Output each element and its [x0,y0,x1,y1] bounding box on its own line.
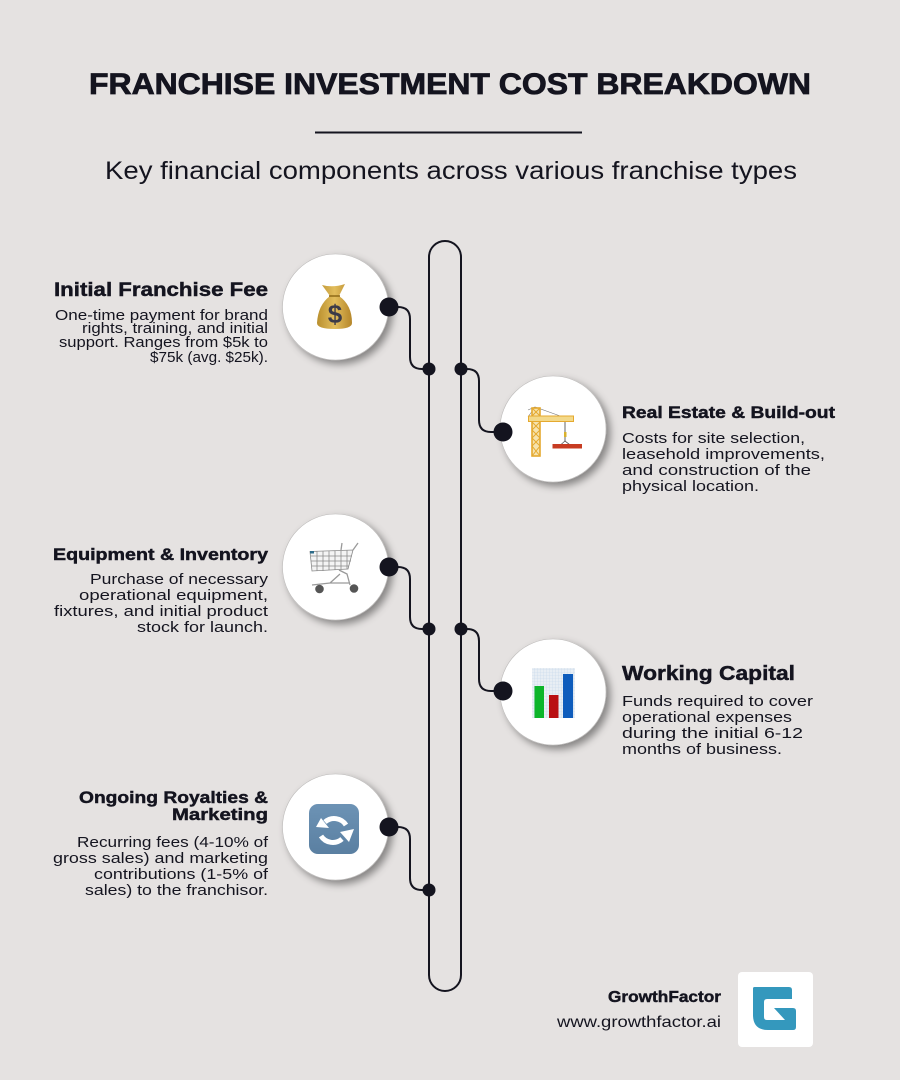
description: sales) to the franchisor. [85,882,268,899]
heading: Real Estate & Build-out [622,403,835,422]
description: during the initial 6-12 [622,725,803,742]
description: physical location. [622,478,759,495]
icon: bar chart [500,639,606,745]
footer brand [556,972,813,1047]
description [622,693,813,758]
description: support. Ranges from $5k to [59,334,268,351]
heading: Working Capital [622,663,795,685]
description: stock for launch. [137,619,268,636]
brand name: GrowthFactor [608,989,721,1006]
connector dot [380,298,398,316]
heading: Marketing [172,805,268,824]
description [55,307,268,366]
connector dot [380,558,398,576]
connector dot [494,682,512,700]
description: rights, training, and initial [82,320,268,337]
icon: money bag [282,254,388,360]
description: contributions (1-5% of [94,866,269,883]
icon: money bag: $ [328,299,343,329]
panel: ongoing royalties and marketing [53,774,398,899]
icon: crane [500,376,606,482]
icon: shopping cart [282,514,388,620]
description: Recurring fees (4-10% of [77,834,269,851]
description: and construction of the [622,462,811,479]
title: FRANCHISE INVESTMENT COST BREAKDOWN [89,68,811,101]
website: www.growthfactor.ai [556,1014,721,1031]
description: gross sales) and marketing [53,850,268,867]
description: leasehold improvements, [622,446,825,463]
description [53,834,269,899]
description: Purchase of necessary [90,571,269,588]
description: Funds required to cover [622,693,813,710]
subtitle: Key financial components across various franchise types [105,157,797,185]
logo [738,972,813,1047]
description: $75k (avg. $25k). [150,349,268,366]
heading: Initial Franchise Fee [54,279,268,301]
connector dot [380,818,398,836]
timeline connectors [389,241,503,991]
heading: Equipment & Inventory [53,545,269,564]
panel: initial franchise fee [54,254,398,366]
description [622,430,825,495]
panel: real estate and build-out [494,376,835,495]
icon: refresh arrows [282,774,388,880]
connector dot [494,422,512,442]
description: operational equipment, [79,587,268,604]
description [54,571,269,636]
description: Costs for site selection, [622,430,805,447]
heading [79,788,268,824]
heading: Ongoing Royalties & [79,788,268,807]
description: fixtures, and initial product [54,603,269,620]
panel: equipment and inventory [53,514,398,636]
description: One-time payment for brand [55,307,268,324]
panel: working capital [494,639,813,758]
description: months of business. [622,741,782,758]
description: operational expenses [622,709,792,726]
